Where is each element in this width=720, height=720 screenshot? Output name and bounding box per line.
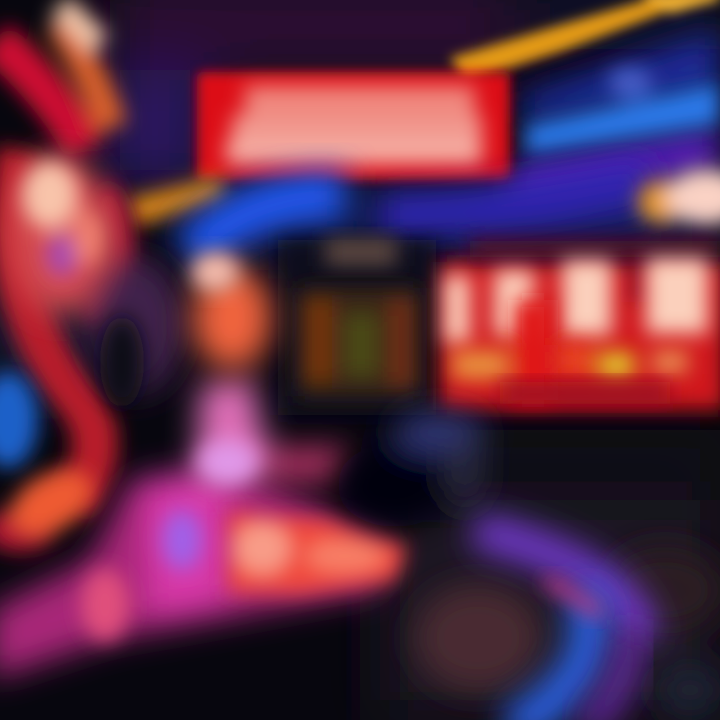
orange ceiling stripe bbox=[450, 0, 720, 82]
dark stool bbox=[337, 412, 486, 527]
blue ceiling band bbox=[505, 30, 720, 205]
curved neon floor strip bbox=[475, 530, 640, 720]
orange left stripe bbox=[126, 176, 226, 226]
pink light column bbox=[195, 375, 347, 485]
center slot machine bbox=[278, 238, 436, 415]
blue curved rail bbox=[190, 180, 660, 255]
orange glow panel bbox=[192, 266, 272, 370]
machine dark gaps bbox=[470, 240, 720, 302]
machine topper bbox=[325, 238, 397, 266]
floor dark blob bbox=[414, 546, 720, 718]
machine base shadow bbox=[500, 382, 670, 404]
machine glowing panels bbox=[444, 258, 708, 343]
left highlight bbox=[22, 161, 104, 277]
machine screen bbox=[298, 288, 420, 396]
left blue light bbox=[0, 372, 38, 468]
sign lettering glow bbox=[226, 86, 482, 164]
left glowing machine body bbox=[8, 155, 185, 395]
right side light sign bbox=[638, 169, 720, 225]
red-orange floor light bbox=[228, 512, 406, 594]
left orange light bbox=[0, 457, 104, 552]
red sign bbox=[197, 72, 510, 180]
machine lower lights bbox=[452, 300, 688, 400]
left arch pillars bbox=[0, 5, 119, 500]
magenta floor bbox=[0, 465, 395, 680]
left dark recess bbox=[100, 316, 144, 408]
right row of slot machines bbox=[440, 240, 720, 410]
